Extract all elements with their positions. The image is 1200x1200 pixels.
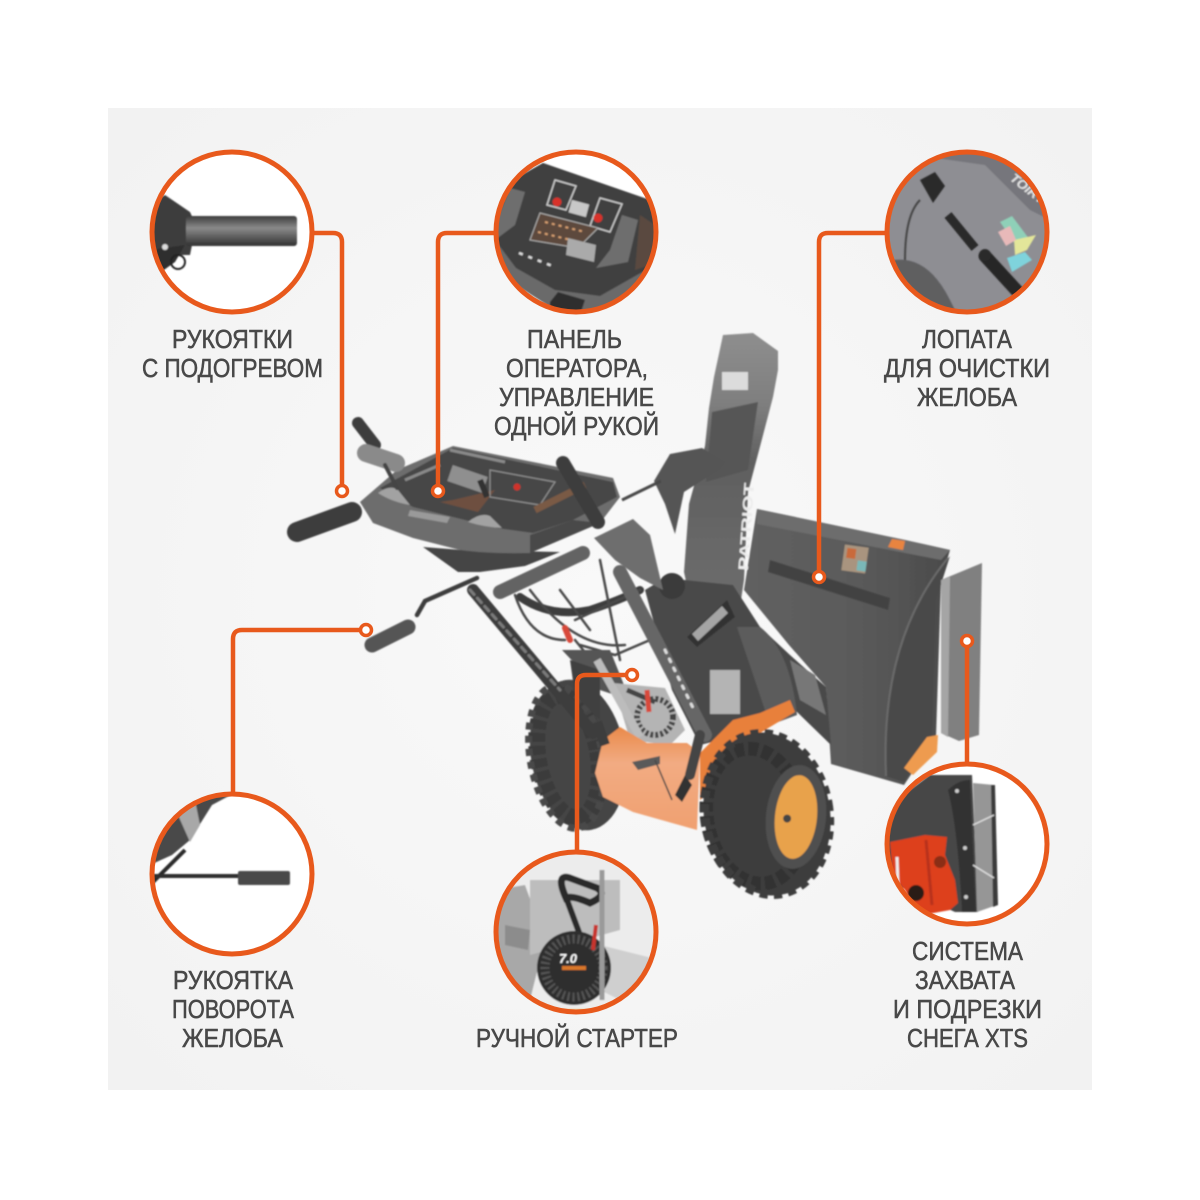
orange body bbox=[595, 700, 795, 830]
label: chute rotation handle bbox=[172, 965, 295, 1053]
label: operator panel bbox=[494, 324, 659, 441]
PATRIOT chute logo: PATRIOT bbox=[735, 482, 757, 571]
wheel hub bbox=[771, 773, 821, 861]
rear frame column bbox=[470, 560, 650, 733]
label: chute shovel: ДЛЯ ОЧИСТКИ bbox=[884, 353, 1050, 383]
snowblower machine bbox=[297, 333, 982, 906]
main control column bbox=[620, 572, 705, 775]
circle: chute cleaning shovel: TOIRT bbox=[1007, 170, 1049, 207]
label: manual starter: РУЧНОЙ СТАРТЕР bbox=[476, 1023, 678, 1053]
right front wheel bbox=[691, 721, 851, 906]
connector lines and markers bbox=[233, 233, 972, 853]
label: XTS system bbox=[893, 936, 1042, 1053]
label: chute rotation handle: ЖЕЛОБА bbox=[182, 1023, 284, 1053]
label: heated grips: С ПОДОГРЕВОМ bbox=[142, 353, 323, 383]
operator console bbox=[360, 446, 620, 553]
markers bbox=[336, 486, 972, 680]
label: chute shovel: ЖЕЛОБА bbox=[917, 382, 1018, 412]
left rear wheel bbox=[518, 672, 637, 838]
connector: chute shovel bbox=[819, 233, 887, 572]
label: chute shovel: ЛОПАТА bbox=[922, 324, 1013, 354]
recoil starter bbox=[597, 660, 685, 745]
chute rotation crank bbox=[372, 578, 477, 645]
label: chute rotation handle: ПОВОРОТА bbox=[172, 994, 295, 1024]
connector: manual starter bbox=[577, 675, 627, 853]
right control plate bbox=[594, 519, 663, 590]
circle: manual starter bbox=[495, 850, 660, 1015]
connector: heated grips bbox=[312, 233, 342, 486]
lower handlebar bbox=[500, 553, 583, 592]
levers and grip bbox=[297, 423, 598, 532]
label: XTS system: СНЕГА XTS bbox=[907, 1023, 1028, 1053]
label: operator panel: ПАНЕЛЬ bbox=[527, 324, 622, 354]
circle: manual starter: 7.0 bbox=[559, 951, 578, 966]
side plate XTS bbox=[904, 563, 982, 775]
auger housing bbox=[744, 509, 950, 785]
connector: chute crank bbox=[233, 630, 361, 795]
circle: chute cleaning shovel bbox=[885, 150, 1050, 320]
chute bbox=[684, 333, 778, 620]
engine bbox=[645, 573, 831, 745]
circle: heated grip bbox=[150, 152, 312, 312]
heated grip bbox=[297, 512, 352, 532]
label: heated grips: РУКОЯТКИ bbox=[172, 324, 293, 354]
connector: operator panel bbox=[438, 233, 497, 486]
label: operator panel: УПРАВЛЕНИЕ bbox=[499, 382, 654, 412]
label: XTS system: ЗАХВАТА bbox=[915, 965, 1016, 995]
label: XTS system: И ПОДРЕЗКИ bbox=[893, 994, 1042, 1024]
under console mechanism bbox=[423, 547, 560, 572]
label: XTS system: СИСТЕМА bbox=[912, 936, 1024, 966]
label: heated grips bbox=[142, 324, 323, 383]
label: operator panel: ОПЕРАТОРА, bbox=[506, 353, 648, 383]
label: chute rotation handle: РУКОЯТКА bbox=[173, 965, 294, 995]
circle: operator panel bbox=[495, 152, 660, 315]
connector: XTS system bbox=[965, 646, 969, 765]
circle: chute rotation handle bbox=[150, 790, 312, 954]
label: operator panel: ОДНОЙ РУКОЙ bbox=[494, 411, 659, 441]
chute control bbox=[622, 448, 725, 534]
circle: XTS system bbox=[885, 764, 1047, 924]
background panel bbox=[108, 108, 1092, 1090]
label: chute shovel bbox=[884, 324, 1050, 412]
